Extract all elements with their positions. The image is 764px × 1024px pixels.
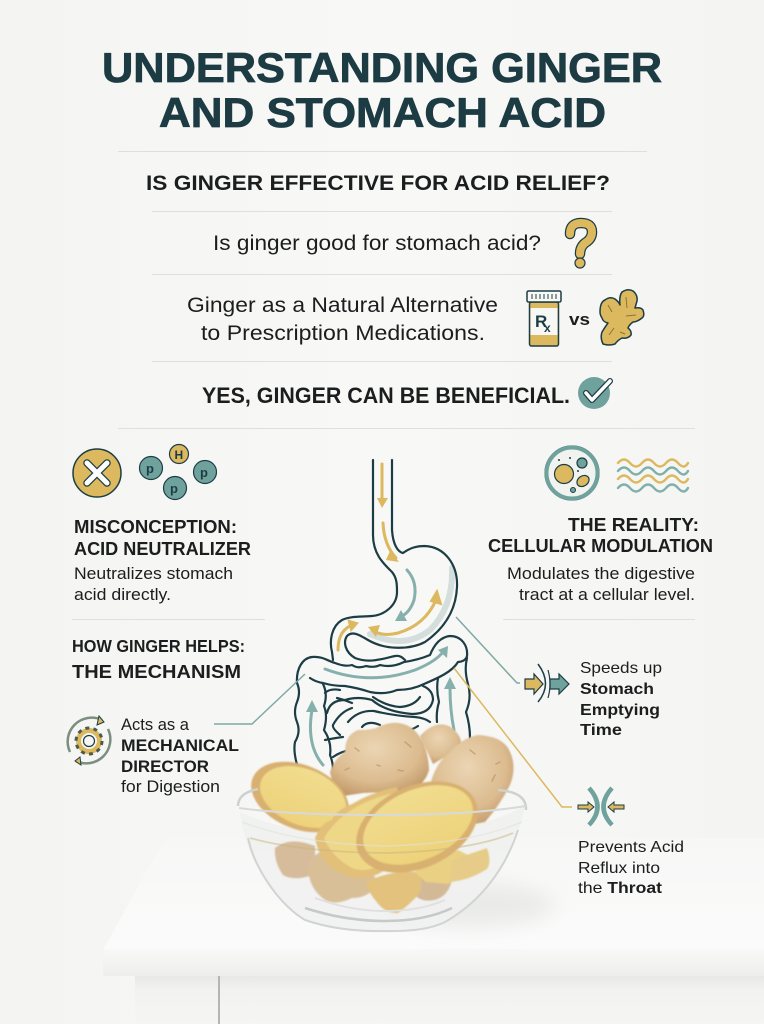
icon: x circle (73, 449, 121, 497)
mechanical director text: MECHANICAL (121, 737, 239, 755)
icon: question mark (570, 223, 592, 268)
misconception body: Neutralizes stomach (74, 565, 233, 583)
misconception heading (74, 516, 251, 559)
stomach emptying text: Time (580, 722, 622, 739)
misconception heading: MISCONCEPTION: (74, 516, 237, 537)
heading: how ginger helps (72, 636, 245, 682)
reality heading (488, 514, 713, 556)
callout: acid reflux (578, 788, 684, 897)
leader: mechanical director (214, 674, 305, 724)
icon: emptying arrows (525, 664, 569, 702)
leader: acid reflux (454, 668, 572, 807)
acid reflux text: Prevents Acid (578, 839, 684, 856)
reality heading: THE REALITY: (568, 514, 699, 535)
colon outline (297, 636, 467, 693)
misconception body (74, 565, 233, 604)
icon: acid molecules: p (170, 481, 178, 496)
icon: prescription bottle: R (535, 312, 547, 331)
mechanical director text: DIRECTOR (121, 758, 209, 776)
stomach emptying text: Speeds up (580, 660, 662, 677)
flow arrows gold (338, 464, 441, 650)
heading: how ginger helps: HOW GINGER HELPS: (72, 636, 245, 656)
icon: cell (545, 446, 599, 500)
icon: check badge (578, 377, 610, 409)
icon: ginger root (600, 290, 644, 345)
bowl glass rim (238, 789, 526, 931)
colon descending walls (294, 658, 470, 770)
vs label: vs (569, 310, 590, 329)
mechanical director text (121, 716, 239, 796)
stomach emptying text (580, 660, 662, 739)
acid reflux text (578, 839, 684, 897)
icon: waves (618, 460, 688, 492)
flow arrows teal (306, 570, 456, 765)
heading: how ginger helps: THE MECHANISM (72, 661, 241, 682)
digestive tract diagram (294, 460, 470, 770)
misconception body: acid directly. (74, 586, 171, 604)
stomach emptying text: Stomach (580, 681, 654, 698)
title: UNDERSTANDING GINGER (102, 44, 662, 91)
callout: stomach emptying (525, 660, 662, 739)
icon: acid molecules: p (200, 465, 208, 480)
small intestine loops (325, 686, 433, 757)
mechanical director text: Acts as a (121, 716, 190, 734)
icon: acid molecules (140, 444, 216, 500)
table (103, 838, 764, 1024)
reality body (507, 565, 695, 604)
ginger knob texture (345, 742, 500, 781)
misconception heading: ACID NEUTRALIZER (74, 538, 251, 559)
esophagus and stomach outline (331, 460, 457, 661)
title: AND STOMACH ACID (159, 89, 606, 136)
bowl body (240, 806, 525, 931)
icon: acid molecules: H (174, 448, 183, 462)
leader: stomach emptying (456, 617, 520, 683)
ginger pieces (241, 723, 514, 913)
acid reflux text: Reflux into (578, 860, 660, 877)
stomach shading (370, 568, 452, 641)
icon: prescription bottle (527, 291, 561, 346)
panel: misconception (73, 444, 251, 604)
ginger bowl photo (238, 723, 555, 931)
mechanical director text: for Digestion (121, 778, 220, 796)
bowl shadow (385, 883, 555, 927)
stomach emptying text: Emptying (580, 702, 660, 719)
question text: Is ginger good for stomach acid? (213, 231, 541, 255)
callout: mechanical director (68, 716, 239, 796)
alternative text: to Prescription Medications. (201, 321, 485, 345)
reality body: Modulates the digestive (507, 565, 695, 583)
icon: acid molecules: p (146, 461, 154, 476)
alternative text (187, 293, 498, 345)
title (102, 44, 662, 136)
icon: gear with arrows (68, 716, 110, 765)
acid reflux text: the Throat (578, 880, 663, 897)
icon: prescription bottle: x (544, 321, 551, 335)
reality body: tract at a cellular level. (519, 586, 695, 604)
reality heading: CELLULAR MODULATION (488, 535, 713, 556)
icon: sphincter (578, 788, 624, 825)
panel: reality (488, 446, 713, 604)
answer text: YES, GINGER CAN BE BENEFICIAL. (202, 383, 570, 408)
heading: is ginger effective: IS GINGER EFFECTIVE FOR ACID RELIEF? (146, 171, 610, 195)
alternative text: Ginger as a Natural Alternative (187, 293, 498, 317)
